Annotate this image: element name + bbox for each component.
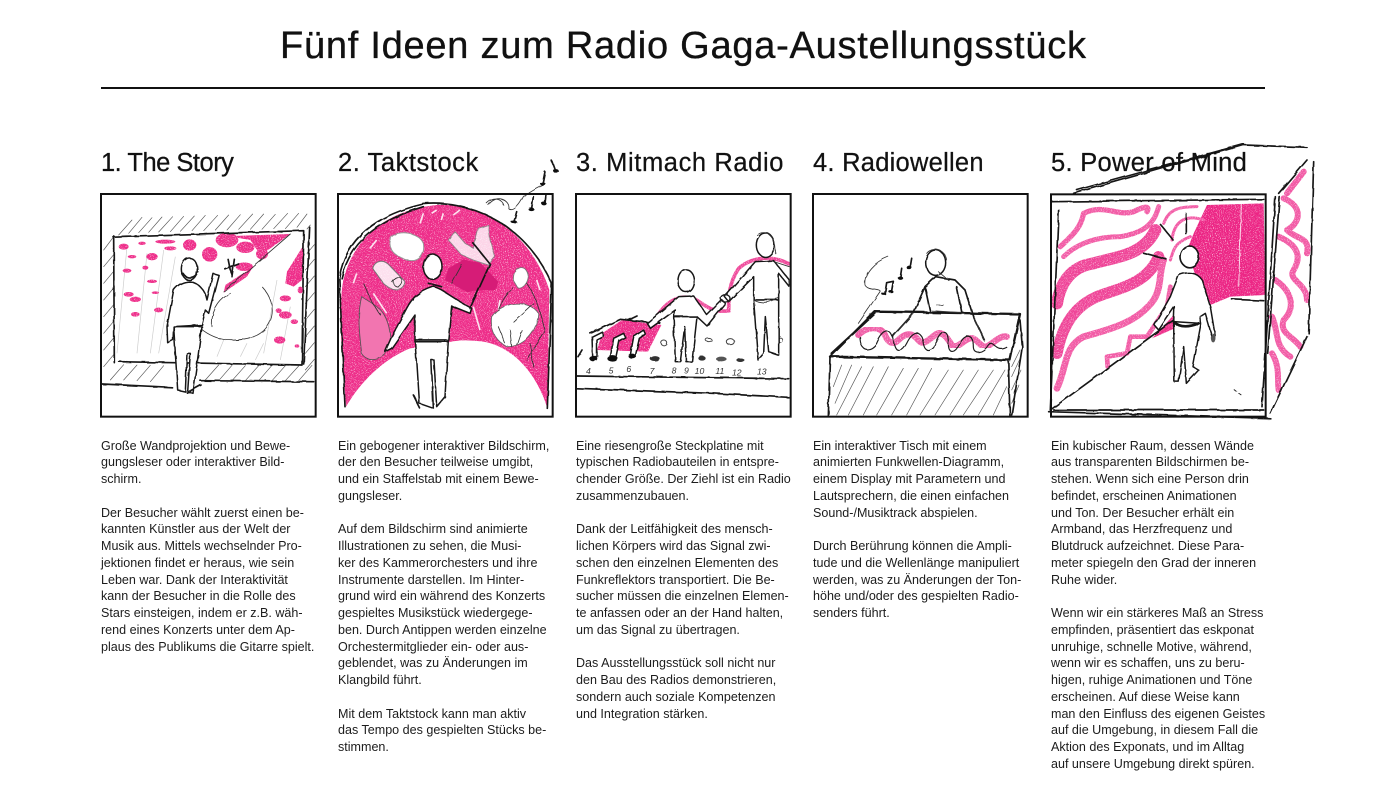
body text: Radiowellen: animierten Funkwellen-Diagramm,: [813, 455, 1004, 469]
body text: Mitmach Radio: lichen Körpers wird das Signal zwi-: [576, 539, 771, 553]
body text: Taktstock: das Tempo des gespielten Stücks be-: [338, 723, 546, 737]
body text: The Story: Große Wandprojektion und Bewe-: [101, 439, 290, 453]
body text: Power of Mind: Ruhe wider.: [1051, 573, 1117, 587]
body text: Mitmach Radio: typischen Radiobauteilen in entspre-: [576, 455, 779, 469]
body text: Taktstock: [338, 439, 549, 754]
sketch: cube room with person: [1048, 143, 1314, 420]
panel: 2. Taktstock: [337, 149, 559, 754]
body text: Mitmach Radio: um das Signal zu übertragen.: [576, 623, 740, 637]
panel: 5. Power of Mind: [1048, 143, 1314, 771]
body text: Mitmach Radio: schen den einzelnen Elementen des: [576, 556, 778, 570]
body text: Radiowellen: tude und die Wellenlänge manipuliert: [813, 556, 1019, 570]
body text: Taktstock: Illustrationen zu sehen, die Musi-: [338, 539, 521, 553]
body text: Power of Mind: Blutdruck aufzeichnet. Diese Para-: [1051, 539, 1244, 553]
body text: The Story: jektionen findet er heraus, wie sein: [101, 556, 294, 570]
body text: The Story: Musik aus. Mittels wechselnder Pro-: [101, 539, 302, 553]
body text: Power of Mind: Armband, das Herzfrequenz und: [1051, 522, 1232, 536]
body text: Radiowellen: [813, 439, 1021, 620]
body text: Taktstock: Klangbild führt.: [338, 673, 422, 687]
body text: Mitmach Radio: zusammenzubauen.: [576, 489, 689, 503]
body text: Taktstock: Orchestermitglieder ein- oder aus-: [338, 640, 528, 654]
body text: The Story: rend eines Konzerts unter dem Ap-: [101, 623, 295, 637]
circuit board component numbers: 4: [586, 366, 591, 376]
body text: The Story: Stars einsteigen, indem er z.B. wäh-: [101, 606, 303, 620]
body text: Power of Mind: befindet, erscheinen Animationen: [1051, 489, 1237, 503]
body text: Radiowellen: senders führt.: [813, 606, 890, 620]
circuit board component numbers: 8: [672, 365, 677, 375]
body text: Radiowellen: einem Display mit Parametern und: [813, 472, 1005, 486]
body text: The Story: kannten Künstler aus der Welt der: [101, 522, 290, 536]
body text: Power of Mind: Wenn wir ein stärkeres Maß an Stress: [1051, 606, 1263, 620]
body text: Power of Mind: und Ton. Der Besucher erhält ein: [1051, 506, 1234, 520]
body text: The Story: Der Besucher wählt zuerst einen be-: [101, 506, 304, 520]
body text: Power of Mind: aus transparenten Bildschirmen be-: [1051, 455, 1249, 469]
body text: Mitmach Radio: sondern auch soziale Kompetenzen: [576, 690, 776, 704]
heading: Radiowellen: 4. Radiowellen: [813, 149, 984, 177]
body text: Mitmach Radio: Eine riesengroße Steckplatine mit: [576, 439, 764, 453]
body text: Mitmach Radio: sucher müssen die einzelnen Elemen-: [576, 589, 789, 603]
body text: Mitmach Radio: [576, 439, 791, 721]
circuit board component numbers: 5: [609, 365, 614, 375]
circuit board component numbers: [586, 364, 767, 377]
body text: Taktstock: und ein Staffelstab mit einem Bewe-: [338, 472, 539, 486]
body text: Power of Mind: empfinden, präsentiert das eskponat: [1051, 623, 1254, 637]
body text: Taktstock: grund wird ein während des Konzerts: [338, 589, 545, 603]
body text: Power of Mind: erscheinen. Auf diese Weise kann: [1051, 690, 1240, 704]
body text: Taktstock: gungsleser.: [338, 489, 402, 503]
body text: Mitmach Radio: Dank der Leitfähigkeit des mensch-: [576, 522, 773, 536]
body text: Power of Mind: Aktion des Exponats, und im Alltag: [1051, 740, 1244, 754]
body text: Mitmach Radio: chender Größe. Der Ziehl ist ein Radio: [576, 472, 791, 486]
body text: The Story: [100, 439, 314, 654]
panel: 3. Mitmach Radio: [575, 149, 792, 721]
body text: The Story: kann der Besucher in die Rolle des: [101, 589, 296, 603]
body text: Taktstock: gespieltes Musikstück wiedergege-: [338, 606, 533, 620]
circuit board component numbers: 10: [695, 366, 704, 376]
body text: Power of Mind: auf unsere Umgebung direkt spüren.: [1051, 757, 1255, 771]
body text: Power of Mind: man den Einfluss des eigenen Geistes: [1051, 707, 1265, 721]
body text: Mitmach Radio: und Integration stärken.: [576, 707, 708, 721]
body text: Power of Mind: wenn wir es schaffen, uns zu beru-: [1051, 656, 1245, 670]
heading: The Story: 1. The Story: [101, 149, 233, 177]
body text: Taktstock: Mit dem Taktstock kann man aktiv: [338, 707, 526, 721]
panel: 4. Radiowellen: [812, 149, 1029, 620]
body text: Taktstock: der den Besucher teilweise umgibt,: [338, 455, 533, 469]
body text: Taktstock: Instrumente darstellen. Im Hinter-: [338, 573, 524, 587]
body text: Mitmach Radio: Das Ausstellungsstück soll nicht nur: [576, 656, 775, 670]
body text: Power of Mind: stehen. Wenn sich eine Person drin: [1051, 472, 1249, 486]
circuit board component numbers: 13: [757, 367, 767, 377]
sketch: interactive wave table: [812, 193, 1029, 418]
body text: Radiowellen: werden, was zu Änderungen der Ton-: [813, 573, 1021, 587]
body text: The Story: gungsleser oder interaktiver Bild-: [101, 455, 284, 469]
sketch: conductor at curved screen: [337, 159, 559, 418]
body text: Power of Mind: auf die Umgebung, in diesem Fall die: [1051, 723, 1258, 737]
panel: 1. The Story: [100, 149, 317, 654]
body text: Mitmach Radio: te anfassen oder an der Hand halten,: [576, 606, 783, 620]
body text: Power of Mind: Ein kubischer Raum, dessen Wände: [1051, 439, 1254, 453]
body text: Taktstock: ben. Durch Antippen werden einzelne: [338, 623, 547, 637]
sketch: people holding hands on circuit board: [575, 193, 792, 418]
body text: Taktstock: Ein gebogener interaktiver Bildschirm,: [338, 439, 549, 453]
body text: Power of Mind: higen, ruhige Animationen und Töne: [1051, 673, 1252, 687]
body text: The Story: schirm.: [101, 472, 141, 486]
body text: Radiowellen: Lautsprechern, die einen einfachen: [813, 489, 1009, 503]
body text: Taktstock: ker des Kammerorchesters und ihre: [338, 556, 537, 570]
body text: Power of Mind: [1051, 439, 1265, 771]
heading: Mitmach Radio: 3. Mitmach Radio: [576, 149, 784, 177]
body text: Radiowellen: Sound-/Musiktrack abspielen.: [813, 506, 978, 520]
body text: Radiowellen: Durch Berührung können die Ampli-: [813, 539, 1012, 553]
heading: Power of Mind: 5. Power of Mind: [1051, 149, 1247, 177]
circuit board component numbers: 12: [732, 367, 742, 377]
body text: The Story: plaus des Publikums die Gitarre spielt.: [101, 640, 314, 654]
title: Fünf Ideen zum Radio Gaga-Austellungsstück: [280, 25, 1087, 67]
body text: Mitmach Radio: den Bau des Radios demonstrieren,: [576, 673, 776, 687]
body text: Taktstock: stimmen.: [338, 740, 389, 754]
body text: The Story: Leben war. Dank der Interaktivität: [101, 573, 288, 587]
heading: Taktstock: 2. Taktstock: [338, 149, 479, 177]
body text: Power of Mind: unruhige, schnelle Motive, während,: [1051, 640, 1252, 654]
body text: Taktstock: Auf dem Bildschirm sind animierte: [338, 522, 528, 536]
sketch: visitor at wall projection: [100, 193, 317, 418]
body text: Power of Mind: meter spiegeln den Grad der inneren: [1051, 556, 1256, 570]
body text: Taktstock: geblendet, was zu Änderungen im: [338, 656, 528, 670]
circuit board component numbers: 9: [684, 365, 689, 375]
circuit board component numbers: 6: [626, 364, 631, 374]
body text: Radiowellen: höhe und/oder des gespielten Radio-: [813, 589, 1019, 603]
body text: Radiowellen: Ein interaktiver Tisch mit einem: [813, 439, 987, 453]
body text: Mitmach Radio: Funkreflektors transportiert. Die Be-: [576, 573, 775, 587]
circuit board component numbers: 7: [650, 366, 656, 376]
circuit board component numbers: 11: [715, 366, 725, 376]
